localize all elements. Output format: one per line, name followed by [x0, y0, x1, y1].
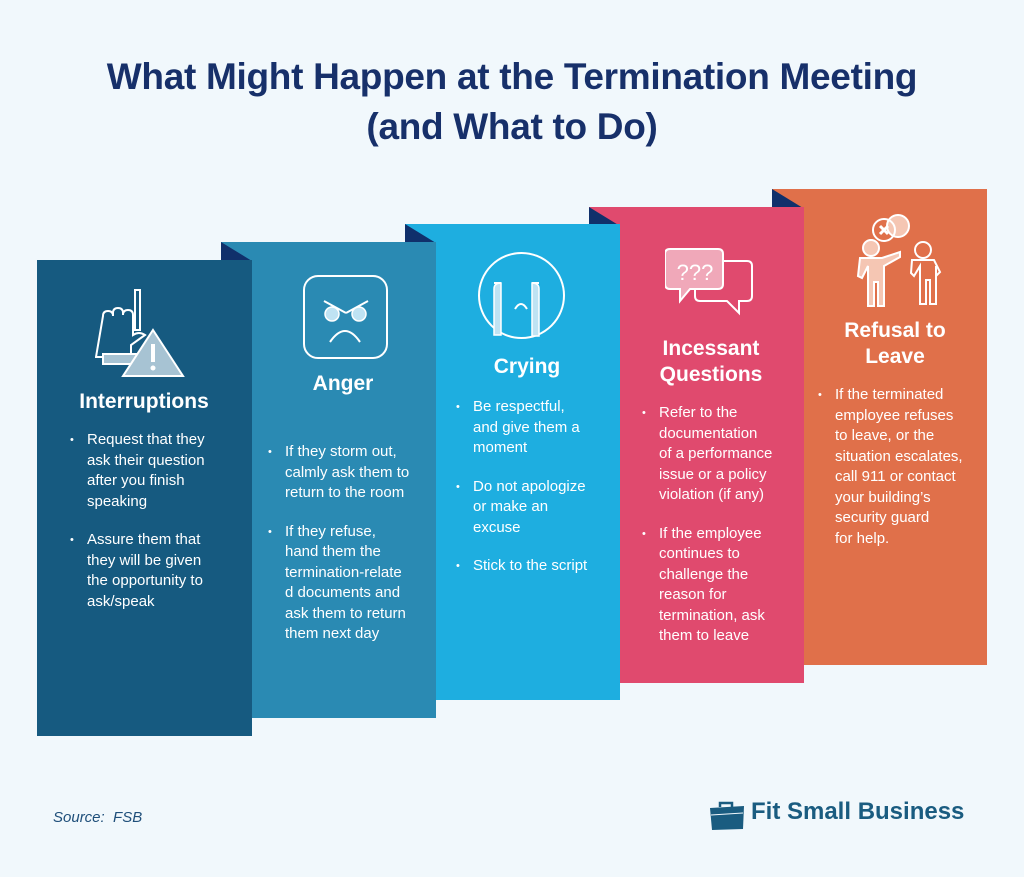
- text: anger bullets: [268, 443, 409, 642]
- heading: interruptions: Interruptions: [79, 390, 209, 413]
- panel: interruptions: [37, 260, 252, 736]
- text: anger bullets: ask them to return: [285, 604, 406, 622]
- heading: incessant questions: Questions: [660, 363, 762, 386]
- text: refusal bullets: security guard: [835, 509, 929, 526]
- text: interruptions bullets: Request that they: [87, 431, 205, 448]
- heading: refusal to leave: [844, 319, 946, 368]
- icon: question bubbles: [665, 248, 753, 316]
- text: crying bullets: excuse: [473, 518, 521, 536]
- text: crying bullets: or make an: [473, 498, 548, 515]
- logo: Fit Small Business: Fit Small Business: [751, 798, 964, 825]
- text: crying bullets: and give them a: [473, 418, 580, 436]
- text: interruptions bullets: ask their question: [87, 452, 205, 468]
- icon: question bubbles: ???: [677, 260, 713, 285]
- text: anger bullets: termination-relate: [285, 564, 402, 580]
- text: refusal bullets: employee refuses: [835, 406, 953, 424]
- heading: anger: Anger: [313, 372, 373, 395]
- panel: refusal to leave: [772, 189, 987, 665]
- text: refusal bullets: situation escalates,: [835, 448, 963, 464]
- text: crying bullets: Do not apologize: [473, 478, 586, 494]
- text: anger bullets: If they storm out,: [285, 443, 397, 460]
- text: interruptions bullets: speaking: [87, 492, 147, 510]
- text: crying bullets: moment: [473, 439, 527, 456]
- text: anger bullets: d documents and: [285, 584, 400, 601]
- text: questions bullets: documentation: [659, 424, 757, 442]
- text: questions bullets: violation (if any): [659, 486, 764, 503]
- title: What Might Happen at the Termination Meeting: [107, 56, 917, 97]
- text: questions bullets: reason for: [659, 586, 727, 603]
- text: interruptions bullets: [70, 431, 205, 610]
- text: crying bullets: [456, 398, 588, 574]
- text: questions bullets: termination, ask: [659, 606, 765, 624]
- text: interruptions bullets: after you finish: [87, 472, 185, 489]
- text: refusal bullets: If the terminated: [835, 386, 943, 403]
- title: [106, 56, 917, 147]
- panel: anger: [221, 242, 436, 718]
- text: crying bullets: Stick to the script: [473, 557, 587, 574]
- text: refusal bullets: call 911 or contact: [835, 468, 956, 485]
- text: refusal bullets: for help.: [835, 530, 889, 546]
- heading: crying: Crying: [494, 355, 560, 378]
- icon: hand with warning: [95, 289, 185, 377]
- text: interruptions bullets: the opportunity to: [87, 572, 203, 589]
- text: refusal bullets: your building’s: [835, 488, 931, 506]
- heading: refusal to leave: Leave: [865, 345, 925, 368]
- text: crying bullets: Be respectful,: [473, 398, 565, 415]
- icon: crying face: [478, 252, 565, 339]
- panel: incessant questions: [589, 207, 804, 683]
- text: questions bullets: If the employee: [659, 524, 762, 542]
- heading: refusal to leave: Refusal to: [844, 319, 946, 342]
- text: interruptions bullets: they will be given: [87, 552, 201, 568]
- text: interruptions bullets: Assure them that: [87, 531, 200, 548]
- text: questions bullets: continues to: [659, 545, 740, 562]
- text: anger bullets: them next day: [285, 625, 379, 642]
- text: questions bullets: issue or a policy: [659, 466, 767, 482]
- icon: briefcase: [710, 802, 744, 830]
- icon: two people arguing: [856, 214, 942, 307]
- text: questions bullets: Refer to the: [659, 404, 737, 421]
- text: anger bullets: hand them the: [285, 543, 381, 560]
- text: questions bullets: of a performance: [659, 445, 772, 462]
- text: interruptions bullets: ask/speak: [87, 592, 155, 610]
- source note: Source: FSB: [53, 809, 142, 826]
- text: anger bullets: return to the room: [285, 484, 404, 501]
- text: questions bullets: them to leave: [659, 627, 749, 644]
- text: anger bullets: If they refuse,: [285, 522, 376, 540]
- text: questions bullets: [642, 404, 772, 644]
- heading: incessant questions: Incessant: [663, 337, 759, 360]
- heading: incessant questions: [660, 337, 762, 386]
- text: anger bullets: calmly ask them to: [285, 464, 409, 480]
- icon: angry face: [303, 275, 388, 359]
- fold: [772, 189, 802, 207]
- text: questions bullets: challenge the: [659, 566, 748, 582]
- panel: crying: [405, 224, 620, 700]
- text: refusal bullets: [818, 386, 963, 546]
- text: refusal bullets: to leave, or the: [835, 427, 934, 444]
- title: (and What to Do): [366, 106, 658, 147]
